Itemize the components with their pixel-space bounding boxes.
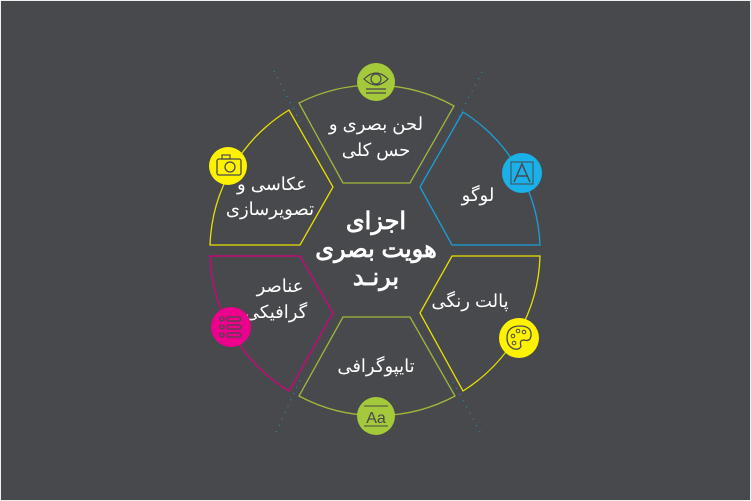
icon: list (pink) (211, 307, 251, 347)
text: color palette: پالت رنگی (431, 290, 509, 312)
icon: palette (yellow) (499, 318, 539, 358)
text: imaging: تصویرسازی (226, 199, 314, 220)
panel: logo segment (420, 112, 540, 245)
text: elements: عناصر (256, 276, 303, 297)
title: center: اجزای (346, 208, 406, 236)
text: graphic: گرافیکی (245, 301, 308, 323)
text: visual tone: لحن بصری و (328, 114, 423, 135)
icon: camera (yellow) (209, 147, 247, 185)
panel: color palette segment (420, 256, 540, 391)
text: typography: تایپوگرافی (337, 355, 415, 377)
icon: typography Aa (green): Aa (366, 410, 386, 427)
text: overall feel: حس کلی (342, 140, 410, 161)
panel: graphic elements segment (210, 256, 333, 391)
title: center: هویت بصری (315, 236, 437, 264)
text: photography and: عکاسی و (236, 174, 307, 195)
icon: typography Aa (green) (357, 397, 395, 435)
text: logo: لوگو (461, 184, 494, 206)
panel: typography segment (299, 317, 455, 416)
icon: logo A (blue) (502, 153, 542, 193)
panel: photography segment (210, 110, 333, 245)
title: center (315, 208, 437, 292)
title: center: برنـد (353, 264, 399, 292)
panel: top segment (visual tone) (299, 85, 454, 183)
icon: eye (green) (357, 63, 395, 101)
